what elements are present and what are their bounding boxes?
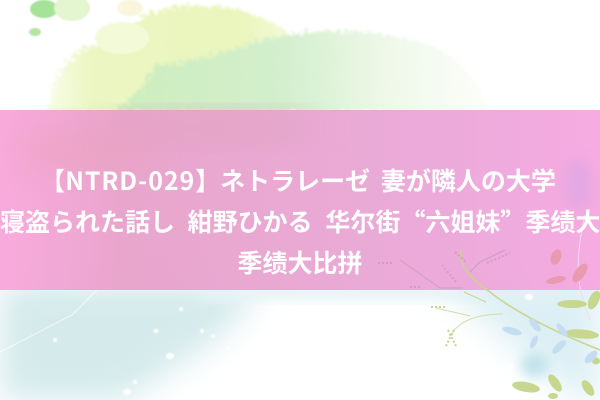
heading line 1: 【NTRD-029】ネトラレーゼ 妻が隣人の大学 — [40, 162, 556, 198]
white light streaks — [0, 222, 495, 400]
yellow-green paint wash — [48, 6, 291, 112]
pink-banner soft texture — [10, 114, 592, 211]
white sparkles — [53, 294, 533, 397]
green paint wash — [115, 31, 490, 112]
heading line 2: 寝盗られた話し 紺野ひかる 华尔街“六姐妹”季绩大 — [0, 203, 600, 239]
green circles — [29, 0, 149, 54]
pale blue wash at bottom — [0, 284, 600, 400]
heading text — [0, 162, 600, 280]
heading line 3: 季绩大比拼 — [237, 244, 362, 280]
pink banner — [0, 110, 600, 290]
plant branch with leaves — [378, 215, 600, 399]
